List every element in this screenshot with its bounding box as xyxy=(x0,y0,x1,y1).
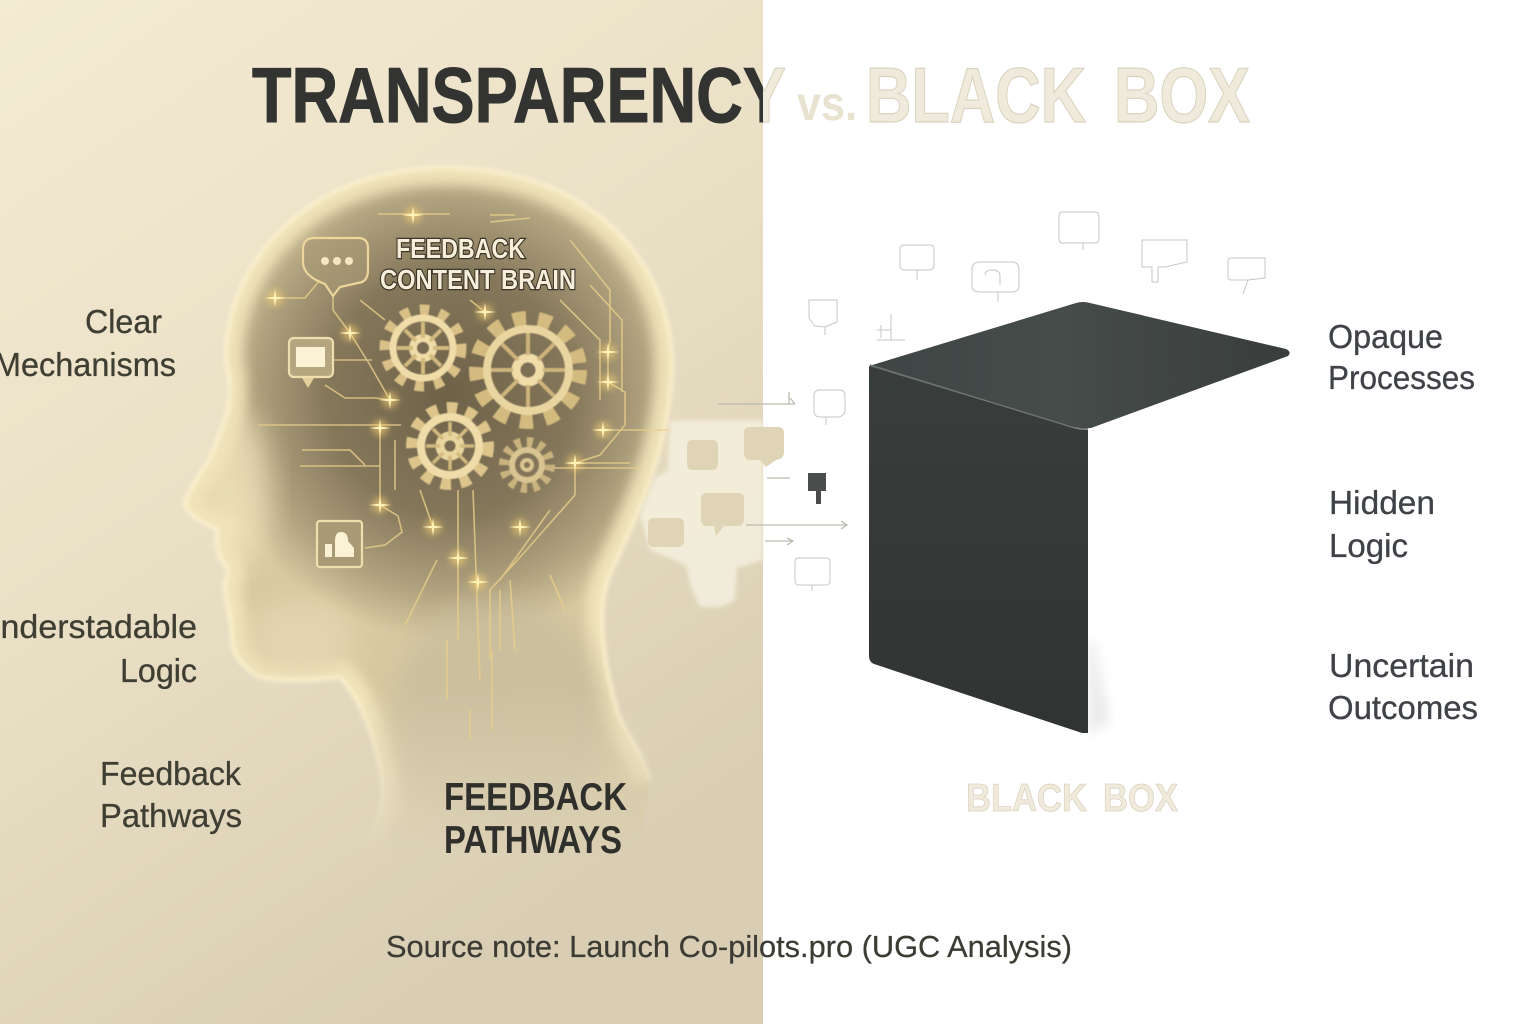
label: opaque processes xyxy=(1328,318,1475,396)
label: clear mechanisms xyxy=(0,303,176,383)
label: uncertain outcomes xyxy=(1328,647,1478,726)
heading: black box: BOX xyxy=(1103,777,1178,820)
icons: floating sketch bubbles and arrows xyxy=(718,212,1265,591)
heading: black box xyxy=(966,777,1178,820)
gear: top left xyxy=(386,311,460,385)
icon: speech bubble with dots xyxy=(303,238,368,296)
heading: feedback pathways: PATHWAYS xyxy=(444,819,622,862)
label: understandable logic: Logic xyxy=(120,652,197,689)
label: hidden logic: Logic xyxy=(1329,527,1408,564)
icon: chart xyxy=(317,521,362,567)
gear: large right xyxy=(477,319,579,421)
panel: transparency background xyxy=(0,0,763,1024)
sparkles xyxy=(264,206,619,591)
box top face xyxy=(869,302,1290,428)
label: clear mechanisms: Clear xyxy=(85,303,162,340)
source note: Source note: Launch Co-pilots.pro (UGC Analysis) xyxy=(386,929,1072,964)
soft shadow xyxy=(1088,640,1110,735)
label: feedback pathways: Feedback xyxy=(100,755,241,792)
gears xyxy=(386,311,579,488)
label: hidden logic: Hidden xyxy=(1329,484,1435,521)
gear: small xyxy=(504,442,550,488)
faded patch xyxy=(640,420,763,607)
label: feedback content brain: CONTENT BRAIN xyxy=(380,264,576,295)
label: uncertain outcomes: Outcomes xyxy=(1328,689,1478,726)
left labels xyxy=(0,303,242,834)
icon: dark bubble xyxy=(808,473,826,504)
gear: bottom xyxy=(413,409,487,483)
label: hidden logic xyxy=(1329,484,1435,564)
box front face xyxy=(869,366,1088,733)
title: transparency: TRANSPARENCY xyxy=(252,51,786,139)
icon: monitor xyxy=(289,338,333,388)
label: feedback pathways xyxy=(100,755,242,834)
label: feedback content brain xyxy=(380,233,576,295)
circuit traces xyxy=(258,214,672,740)
heading: feedback pathways: FEEDBACK xyxy=(444,776,627,819)
icon: glowing head with brain circuitry xyxy=(185,168,672,850)
title: black box part: BOX xyxy=(1114,51,1250,139)
smudged icon transition xyxy=(640,420,784,607)
label: opaque processes: Opaque xyxy=(1328,318,1443,355)
faded bubbles xyxy=(648,427,784,547)
title xyxy=(252,67,1250,124)
label: uncertain outcomes: Uncertain xyxy=(1329,647,1474,684)
heading: feedback pathways xyxy=(444,776,627,862)
label: understandable logic xyxy=(0,608,197,689)
right labels xyxy=(1328,318,1478,726)
label: feedback pathways: Pathways xyxy=(100,797,242,834)
title: transparency faded overflow: TRANSPARENCY xyxy=(252,51,786,139)
box highlight edge xyxy=(870,365,1088,429)
heading: black box: BLACK xyxy=(966,777,1087,820)
icon: black box xyxy=(869,302,1290,735)
title: black box part: BLACK xyxy=(866,51,1086,139)
title: vs: vs. xyxy=(797,78,857,131)
head silhouette xyxy=(185,168,672,850)
panel: black box background xyxy=(763,0,1536,1024)
label: opaque processes: Processes xyxy=(1328,359,1475,396)
label: feedback content brain: FEEDBACK xyxy=(396,233,525,264)
arrows xyxy=(718,392,847,545)
